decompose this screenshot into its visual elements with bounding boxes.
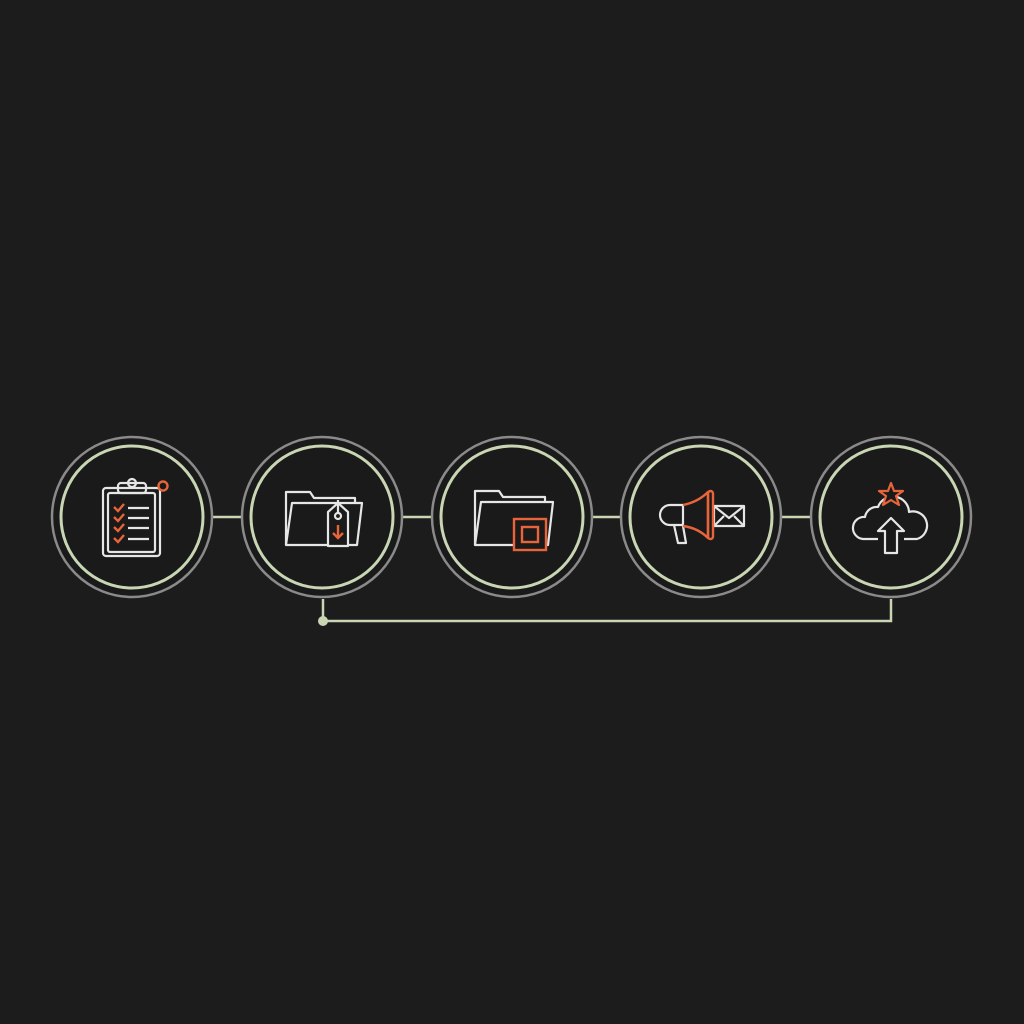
bottom loop connector xyxy=(318,599,891,626)
step 4: megaphone with envelope xyxy=(621,437,781,597)
step 1: clipboard checklist xyxy=(52,437,212,597)
step 5: cloud upload with star xyxy=(811,437,971,597)
connector line between circles xyxy=(213,516,810,518)
step 3: folder with square xyxy=(432,437,592,597)
step 2: folder with tag xyxy=(242,437,402,597)
